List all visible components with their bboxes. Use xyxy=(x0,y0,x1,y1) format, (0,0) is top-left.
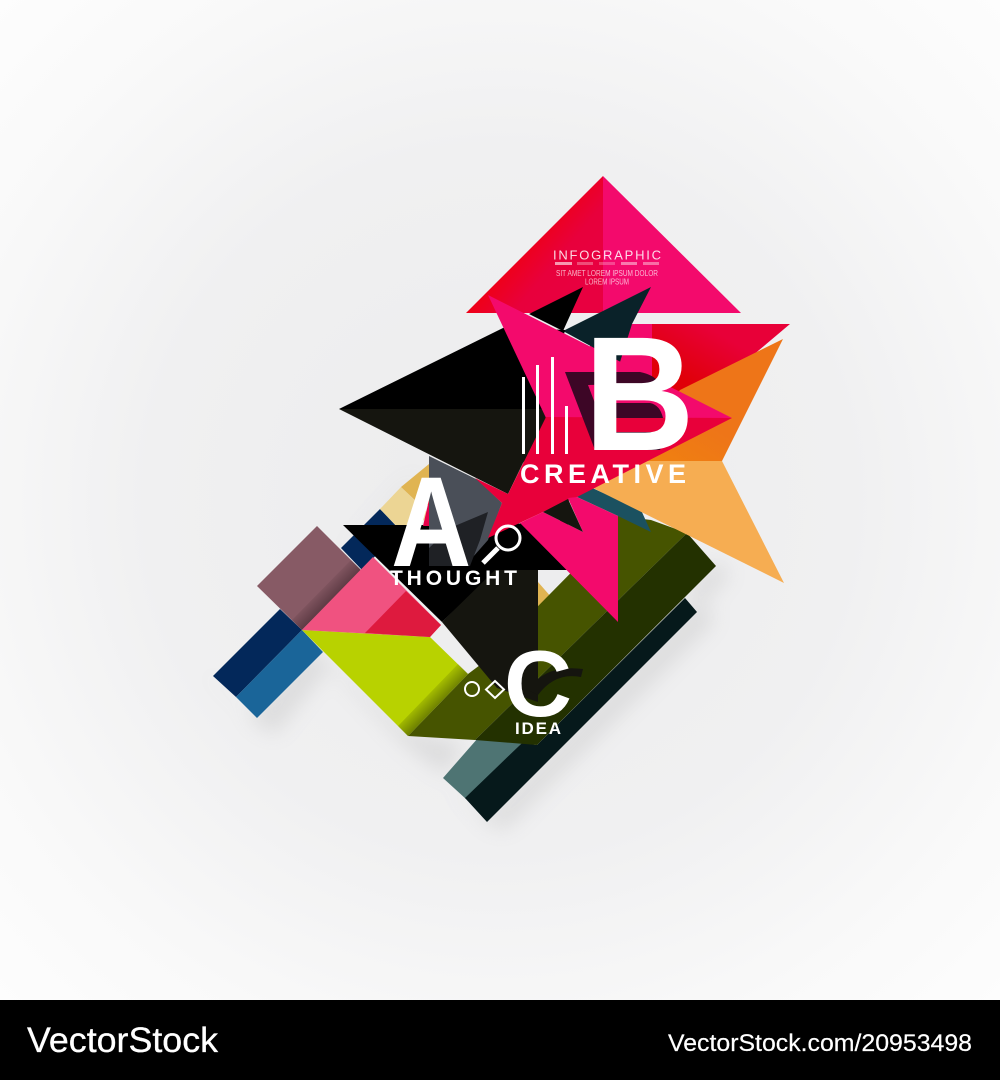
mauve square shadow xyxy=(292,560,361,630)
panel: dark lower block xyxy=(442,568,538,702)
infographic title xyxy=(553,248,661,286)
icon: vertical bars xyxy=(522,357,568,454)
strip: teal and black diagonal band xyxy=(443,598,697,822)
strip: navy and blue diagonal band xyxy=(213,509,400,718)
label THOUGHT: THOUGHT xyxy=(390,567,517,590)
panel: orange wing xyxy=(625,339,783,461)
footer bar xyxy=(0,1000,1000,1080)
label CREATIVE: CREATIVE xyxy=(520,459,686,489)
panel: black lower triangle xyxy=(343,520,568,622)
panel: dark teal spike xyxy=(563,287,651,362)
panel: lime band xyxy=(302,630,468,736)
panel: star, pink lower tip xyxy=(520,497,618,622)
panel: top triangle xyxy=(466,176,741,313)
panel: mauve square xyxy=(257,526,361,630)
lime band shadow xyxy=(398,664,468,736)
infographic title: SIT AMET LOREM IPSUM DOLOR xyxy=(556,269,658,278)
letter C: C xyxy=(504,631,572,736)
panel: light orange wing xyxy=(593,461,784,583)
panel: olive diagonal band xyxy=(408,516,716,745)
label IDEA: IDEA xyxy=(515,719,561,738)
icon: diamond xyxy=(486,681,504,698)
icon: magnifier xyxy=(483,526,520,563)
panel: star, pink upper xyxy=(488,295,732,418)
panel: right red wing xyxy=(590,324,790,400)
panel: black upper spike xyxy=(529,287,583,331)
footer url: VectorStock.com/20953498 xyxy=(668,1030,972,1057)
panel: dark notch in star xyxy=(543,499,583,532)
infographic title: LOREM IPSUM xyxy=(585,278,629,286)
panel: dark B shadow xyxy=(565,372,664,450)
letter A: A xyxy=(391,451,471,594)
footer brand: VectorStock xyxy=(27,1021,219,1060)
strip: tan and gold diagonal band xyxy=(380,464,552,607)
panel: star, red middle xyxy=(475,417,732,538)
panel: pink band xyxy=(302,557,441,637)
icon: circle xyxy=(465,682,479,696)
panel: grey shard with dark swoosh xyxy=(423,456,502,566)
soft drop shadows xyxy=(203,470,730,830)
dark swoosh in C xyxy=(528,668,583,695)
letter B: B xyxy=(584,303,695,485)
infographic title: INFOGRAPHIC xyxy=(553,248,661,262)
panel: large black triangle xyxy=(339,327,565,494)
panel: teal shard xyxy=(577,487,651,532)
